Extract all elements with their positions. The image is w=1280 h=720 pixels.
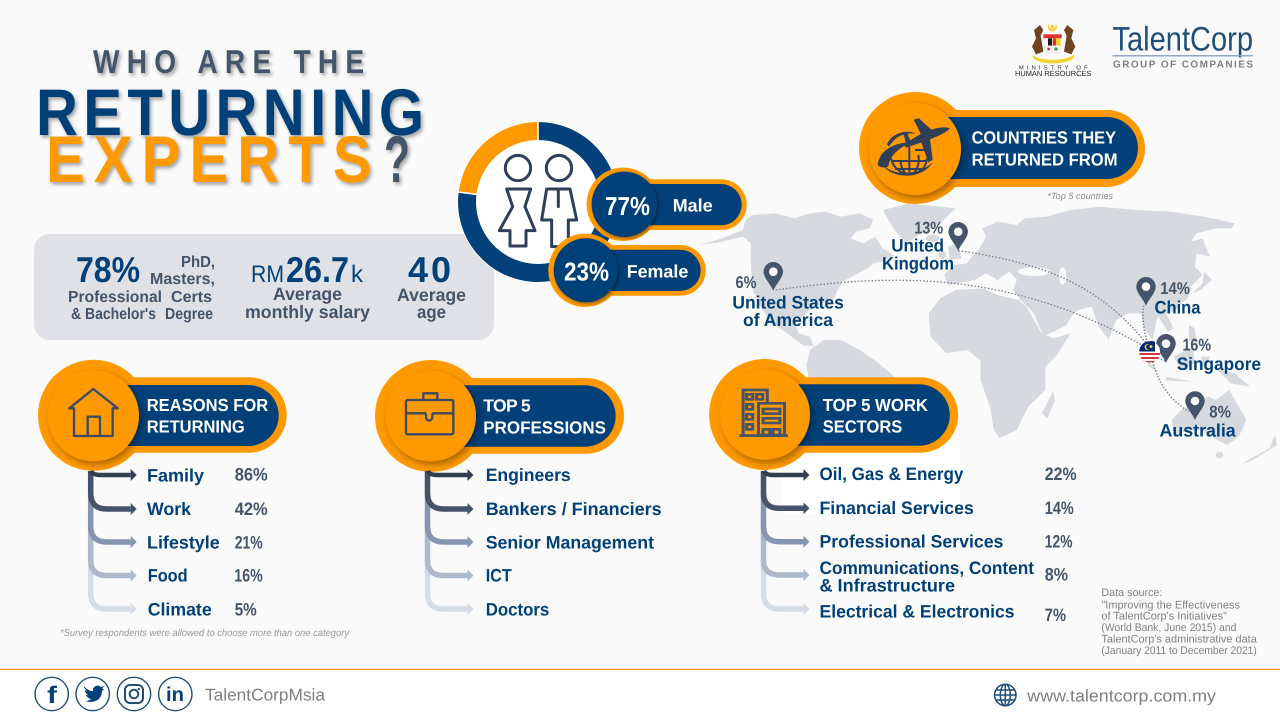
text block: data source: (World Bank, June 2015) and [1101,622,1236,634]
list: sectors and percentages: 22% [1045,464,1077,484]
social handle: TalentCorpMsia [205,686,326,705]
logo: ministry of human resources: MINISTRY OF [1019,64,1088,71]
stat: 78 percent degree: Degree [165,306,213,323]
location: united states: 6% [736,273,756,292]
icon: facebook [35,677,68,711]
location: united kingdom: Kingdom [882,253,954,273]
connector arrows [428,469,474,615]
list: sectors and percentages: 8% [1045,565,1068,585]
list: reasons and percentages: 42% [235,499,268,519]
badge: 77 percent male: 77% [605,191,650,221]
footer [0,669,1280,720]
header: top 5 work sectors [709,359,958,470]
list: reasons and percentages [147,465,268,620]
white patch over map [781,445,960,513]
stat: average age: 40 [408,249,451,290]
stat: 78 percent degree: 78% [76,249,140,290]
list: professions: Doctors [486,600,549,620]
header: reasons for returning: REASONS FOR [147,395,269,415]
list: sectors and percentages: 12% [1045,531,1072,551]
list: sectors and percentages: 14% [1045,498,1074,518]
location: united kingdom: 13% [914,218,943,237]
icon: female and male figures [499,155,577,247]
badge: 77 percent male [587,168,747,241]
title line: experts: EXPERTS [46,122,372,196]
icon: linkedin [159,677,192,711]
list: reasons and percentages: Family [147,466,204,486]
list: sectors and percentages: Communications, Content [820,558,1034,578]
list: reasons and percentages: Food [148,566,188,586]
stat: average monthly salary: 26.7 [286,249,349,290]
location: united states: of America [743,310,834,330]
website: www.talentcorp.com.my [1026,687,1217,706]
icon: globe and plane [878,118,950,176]
list: reasons and percentages: 21% [235,532,263,552]
title line: experts: ? [384,122,410,196]
list: sectors and percentages: Professional Services [820,531,1003,551]
text block: data source: (January 2011 to December 2021) [1101,645,1257,657]
header: countries they returned from: RETURNED FROM [972,150,1118,170]
logo: talentcorp: GROUP OF COMPANIES [1113,59,1253,70]
header: top 5 work sectors: TOP 5 WORK [823,395,928,415]
location: china: 14% [1160,279,1190,298]
badge: 77 percent male: Male [673,196,713,216]
location: singapore [1156,334,1261,374]
location: china [1136,277,1201,317]
connector arrows [764,469,810,615]
title line: returning: RETURNING [36,75,424,149]
text block: data source: of TalentCorp's Initiatives" [1101,610,1227,622]
list: reasons and percentages: 5% [235,600,257,620]
header: top 5 professions: TOP 5 [483,396,531,416]
list: sectors and percentages: Oil, Gas & Energy [820,464,963,484]
location: united kingdom: United [891,236,944,256]
world map [699,203,1277,463]
stat: 78 percent degree: PhD, [181,254,215,271]
location: australia: Australia [1160,421,1237,441]
logo: talentcorp [1112,21,1253,70]
icon: globe [995,684,1016,706]
stat: 78 percent degree: Professional [68,289,162,306]
location: united states [732,262,844,330]
logo: ministry of human resources: HUMAN RESOURCES [1015,69,1091,78]
list: professions [486,465,662,620]
stat: average age [397,249,466,322]
stat: 78 percent degree: & Bachelor's [71,306,156,323]
text block: data source: Data source: [1101,587,1162,599]
location: united kingdom [882,218,968,273]
header: countries they returned from: COUNTRIES THEY [972,127,1116,147]
icon: coat of arms [1032,22,1075,63]
header: reasons for returning [38,360,287,471]
icon: office buildings [739,390,788,436]
panel: top 5 work sectors [709,359,1077,625]
title line: who are the: WHO ARE THE [93,43,364,80]
header: top 5 professions: PROFESSIONS [483,417,606,437]
connector arrows [91,469,137,615]
icon: facebook: f [47,682,58,709]
list: sectors and percentages: 7% [1045,605,1066,625]
list: sectors and percentages: Financial Services [820,498,974,518]
title [36,43,424,196]
icon: linkedin: in [166,684,184,706]
list: reasons and percentages: Climate [148,600,212,620]
text block: data source [1101,587,1258,657]
header: reasons for returning: RETURNING [147,417,245,437]
stat: average age: age [417,302,446,322]
icon: house [69,389,118,436]
text block: data source: TalentCorp's administrative data [1101,633,1258,645]
badge: 23 percent female: Female [627,262,688,282]
icon: twitter [76,677,109,711]
list: reasons and percentages: Lifestyle [147,532,220,552]
list: professions: ICT [486,566,512,586]
stat: average monthly salary [245,249,370,322]
logo: ministry of human resources [1015,22,1091,78]
location: singapore: 16% [1182,336,1211,355]
location: china: China [1154,297,1201,317]
list: sectors and percentages [820,464,1077,625]
stat: 78 percent degree: Masters, [150,271,215,288]
stat: 78 percent degree [68,249,215,323]
note: survey respondents: *Survey respondents were allowed to choose more than one category [60,628,350,639]
panel: reasons for returning [38,360,350,639]
icon: instagram [117,677,151,711]
location: australia [1160,391,1237,441]
list: reasons and percentages: 16% [234,566,263,586]
badge: 23 percent female: 23% [564,257,609,287]
header: top 5 professions [375,360,624,472]
list: professions: Senior Management [486,532,654,552]
location: australia: 8% [1209,402,1231,421]
stat: average age: Average [397,285,466,305]
list: sectors and percentages: & Infrastructure [820,576,955,596]
icon: malaysia flag [1139,341,1160,363]
location: united states: United States [732,292,844,312]
icon: briefcase [406,393,453,434]
stat: average monthly salary: Average [273,284,342,304]
list: reasons and percentages: 86% [235,465,268,485]
stat: average monthly salary: k [351,261,364,288]
stat: average monthly salary: monthly salary [245,302,370,322]
header: top 5 work sectors: SECTORS [823,417,902,437]
note: top 5 countries: *Top 5 countries [1047,191,1113,201]
stat: average monthly salary: RM [251,261,284,288]
donut chart: gender split [457,121,619,283]
route lines to malaysia [776,251,1189,412]
badge: 23 percent female [548,234,706,307]
header: countries they returned from [859,92,1145,204]
list: professions: Engineers [486,465,571,485]
list: professions: Bankers / Financiers [486,499,662,519]
logo: talentcorp: TalentCorp [1112,21,1253,59]
text block: data source: "Improving the Effectiveness [1101,599,1240,611]
panel: top 5 professions [375,360,662,620]
panel: key statistics [34,234,494,340]
stat: 78 percent degree: Certs [171,289,212,306]
list: sectors and percentages: Electrical & Electronics [820,601,1014,621]
location: singapore: Singapore [1177,354,1261,374]
list: reasons and percentages: Work [147,499,192,519]
